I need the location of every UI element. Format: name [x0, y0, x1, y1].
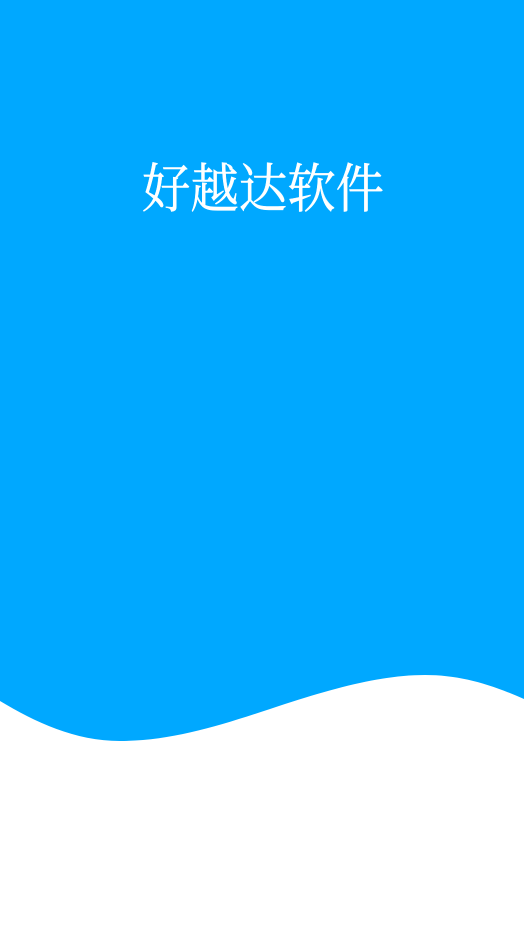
blue wave background — [0, 0, 524, 741]
title: 好越达软件 — [142, 161, 384, 219]
